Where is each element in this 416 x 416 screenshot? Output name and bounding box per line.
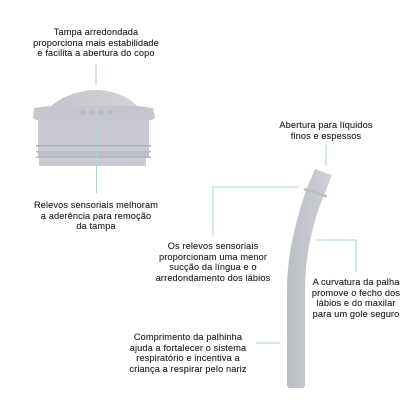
text: sensory ridges on lid	[34, 200, 158, 231]
text: rounded lid: proporciona mais estabilidade	[33, 38, 159, 48]
icon: straw	[287, 169, 332, 388]
text: sensory ridges on straw	[156, 241, 270, 282]
text: straw length: respiratório e incentiva a	[136, 353, 240, 363]
text: straw length	[129, 332, 247, 374]
text: sensory ridges on straw: proporcionam uma menor	[159, 252, 267, 262]
leader lines	[96, 64, 356, 343]
text: straw curvature: A curvatura da palha	[313, 277, 399, 287]
text: opening: Abertura para líquidos	[279, 120, 373, 130]
text: rounded lid	[33, 27, 159, 58]
text: straw curvature: para um gole seguro	[313, 308, 399, 318]
text: sensory ridges on straw: sucção da língua e o	[169, 262, 257, 272]
text: rounded lid: e facilita a abertura do copo	[37, 48, 155, 58]
text: straw curvature: promove o fecho dos	[312, 288, 400, 298]
text: sensory ridges on straw: Os relevos sensoriais	[168, 241, 258, 251]
text: sensory ridges on straw: arredondamento dos lábios	[156, 272, 270, 282]
text: sensory ridges on lid: Relevos sensoriais melhoram	[34, 200, 158, 210]
text: straw length: Comprimento da palhinha	[134, 332, 242, 342]
text: rounded lid: Tampa arredondada	[54, 27, 138, 37]
text: straw length: criança a respirar pelo nariz	[129, 364, 247, 374]
text: sensory ridges on lid: da tampa	[76, 221, 116, 231]
text: opening: finos e espessos	[291, 130, 361, 140]
text: straw curvature: lábios e do maxilar	[316, 298, 396, 308]
text: sensory ridges on lid: a aderência para remoção	[41, 210, 151, 220]
text: opening	[279, 120, 373, 141]
text: straw length: ajuda a fortalecer o sistema	[130, 342, 246, 352]
icon: lid	[33, 90, 155, 166]
text: straw curvature	[312, 277, 400, 319]
